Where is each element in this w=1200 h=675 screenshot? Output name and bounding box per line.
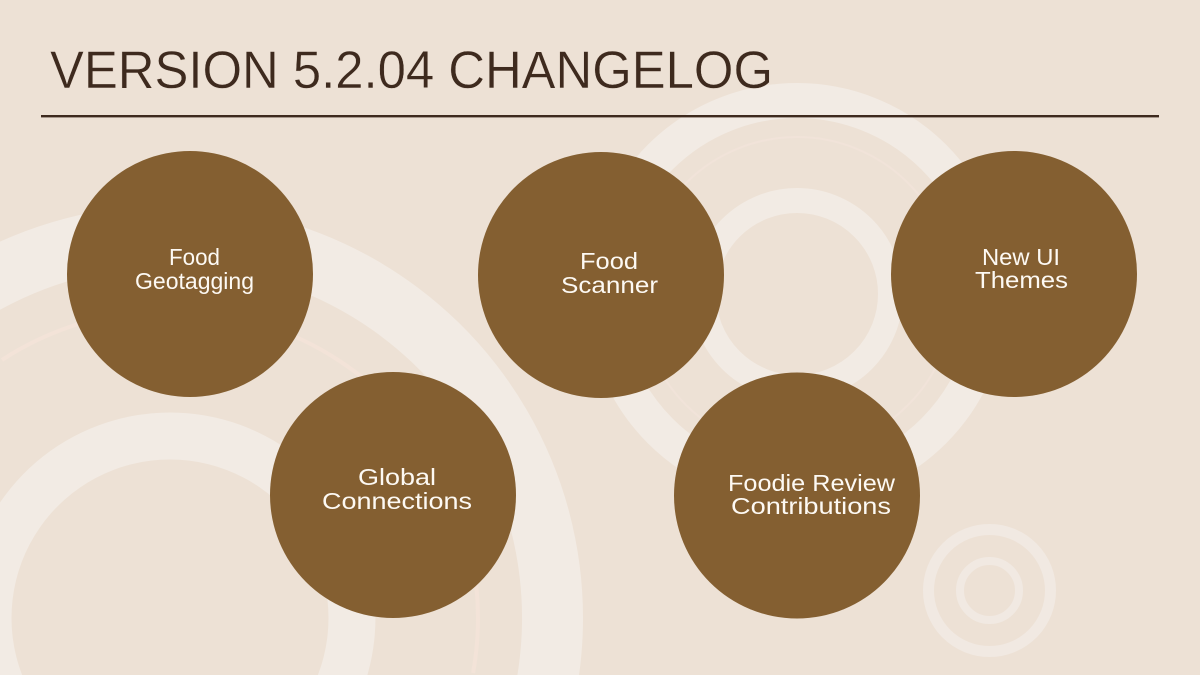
circle: Food Geotagging (67, 151, 313, 397)
circle: New UI Themes (891, 151, 1137, 397)
circle: New UI Themes: New UI (982, 244, 1060, 270)
title: VERSION 5.2.04 CHANGELOG (50, 41, 773, 100)
circle: Global Connections (270, 372, 516, 618)
circle: Foodie Review Contributions: Foodie Review (728, 470, 895, 496)
circle: Food Scanner: Scanner (561, 272, 658, 298)
circle: Global Connections: Global (358, 464, 436, 490)
circle: Food Geotagging: Food (169, 244, 220, 270)
background rings: left (0, 205, 583, 675)
circle: Global Connections: Connections (322, 488, 472, 514)
circle: Food Scanner: Food (580, 248, 638, 274)
circle: Foodie Review Contributions: Contributions (731, 493, 891, 519)
circle: Food Scanner (478, 152, 724, 398)
circle: New UI Themes: Themes (975, 267, 1068, 293)
circle: Foodie Review Contributions (674, 372, 920, 618)
title underline (41, 115, 1159, 117)
background rings: centre right (604, 100, 990, 488)
circle: Food Geotagging: Geotagging (135, 268, 254, 294)
background rings: small lower right (928, 530, 1050, 652)
